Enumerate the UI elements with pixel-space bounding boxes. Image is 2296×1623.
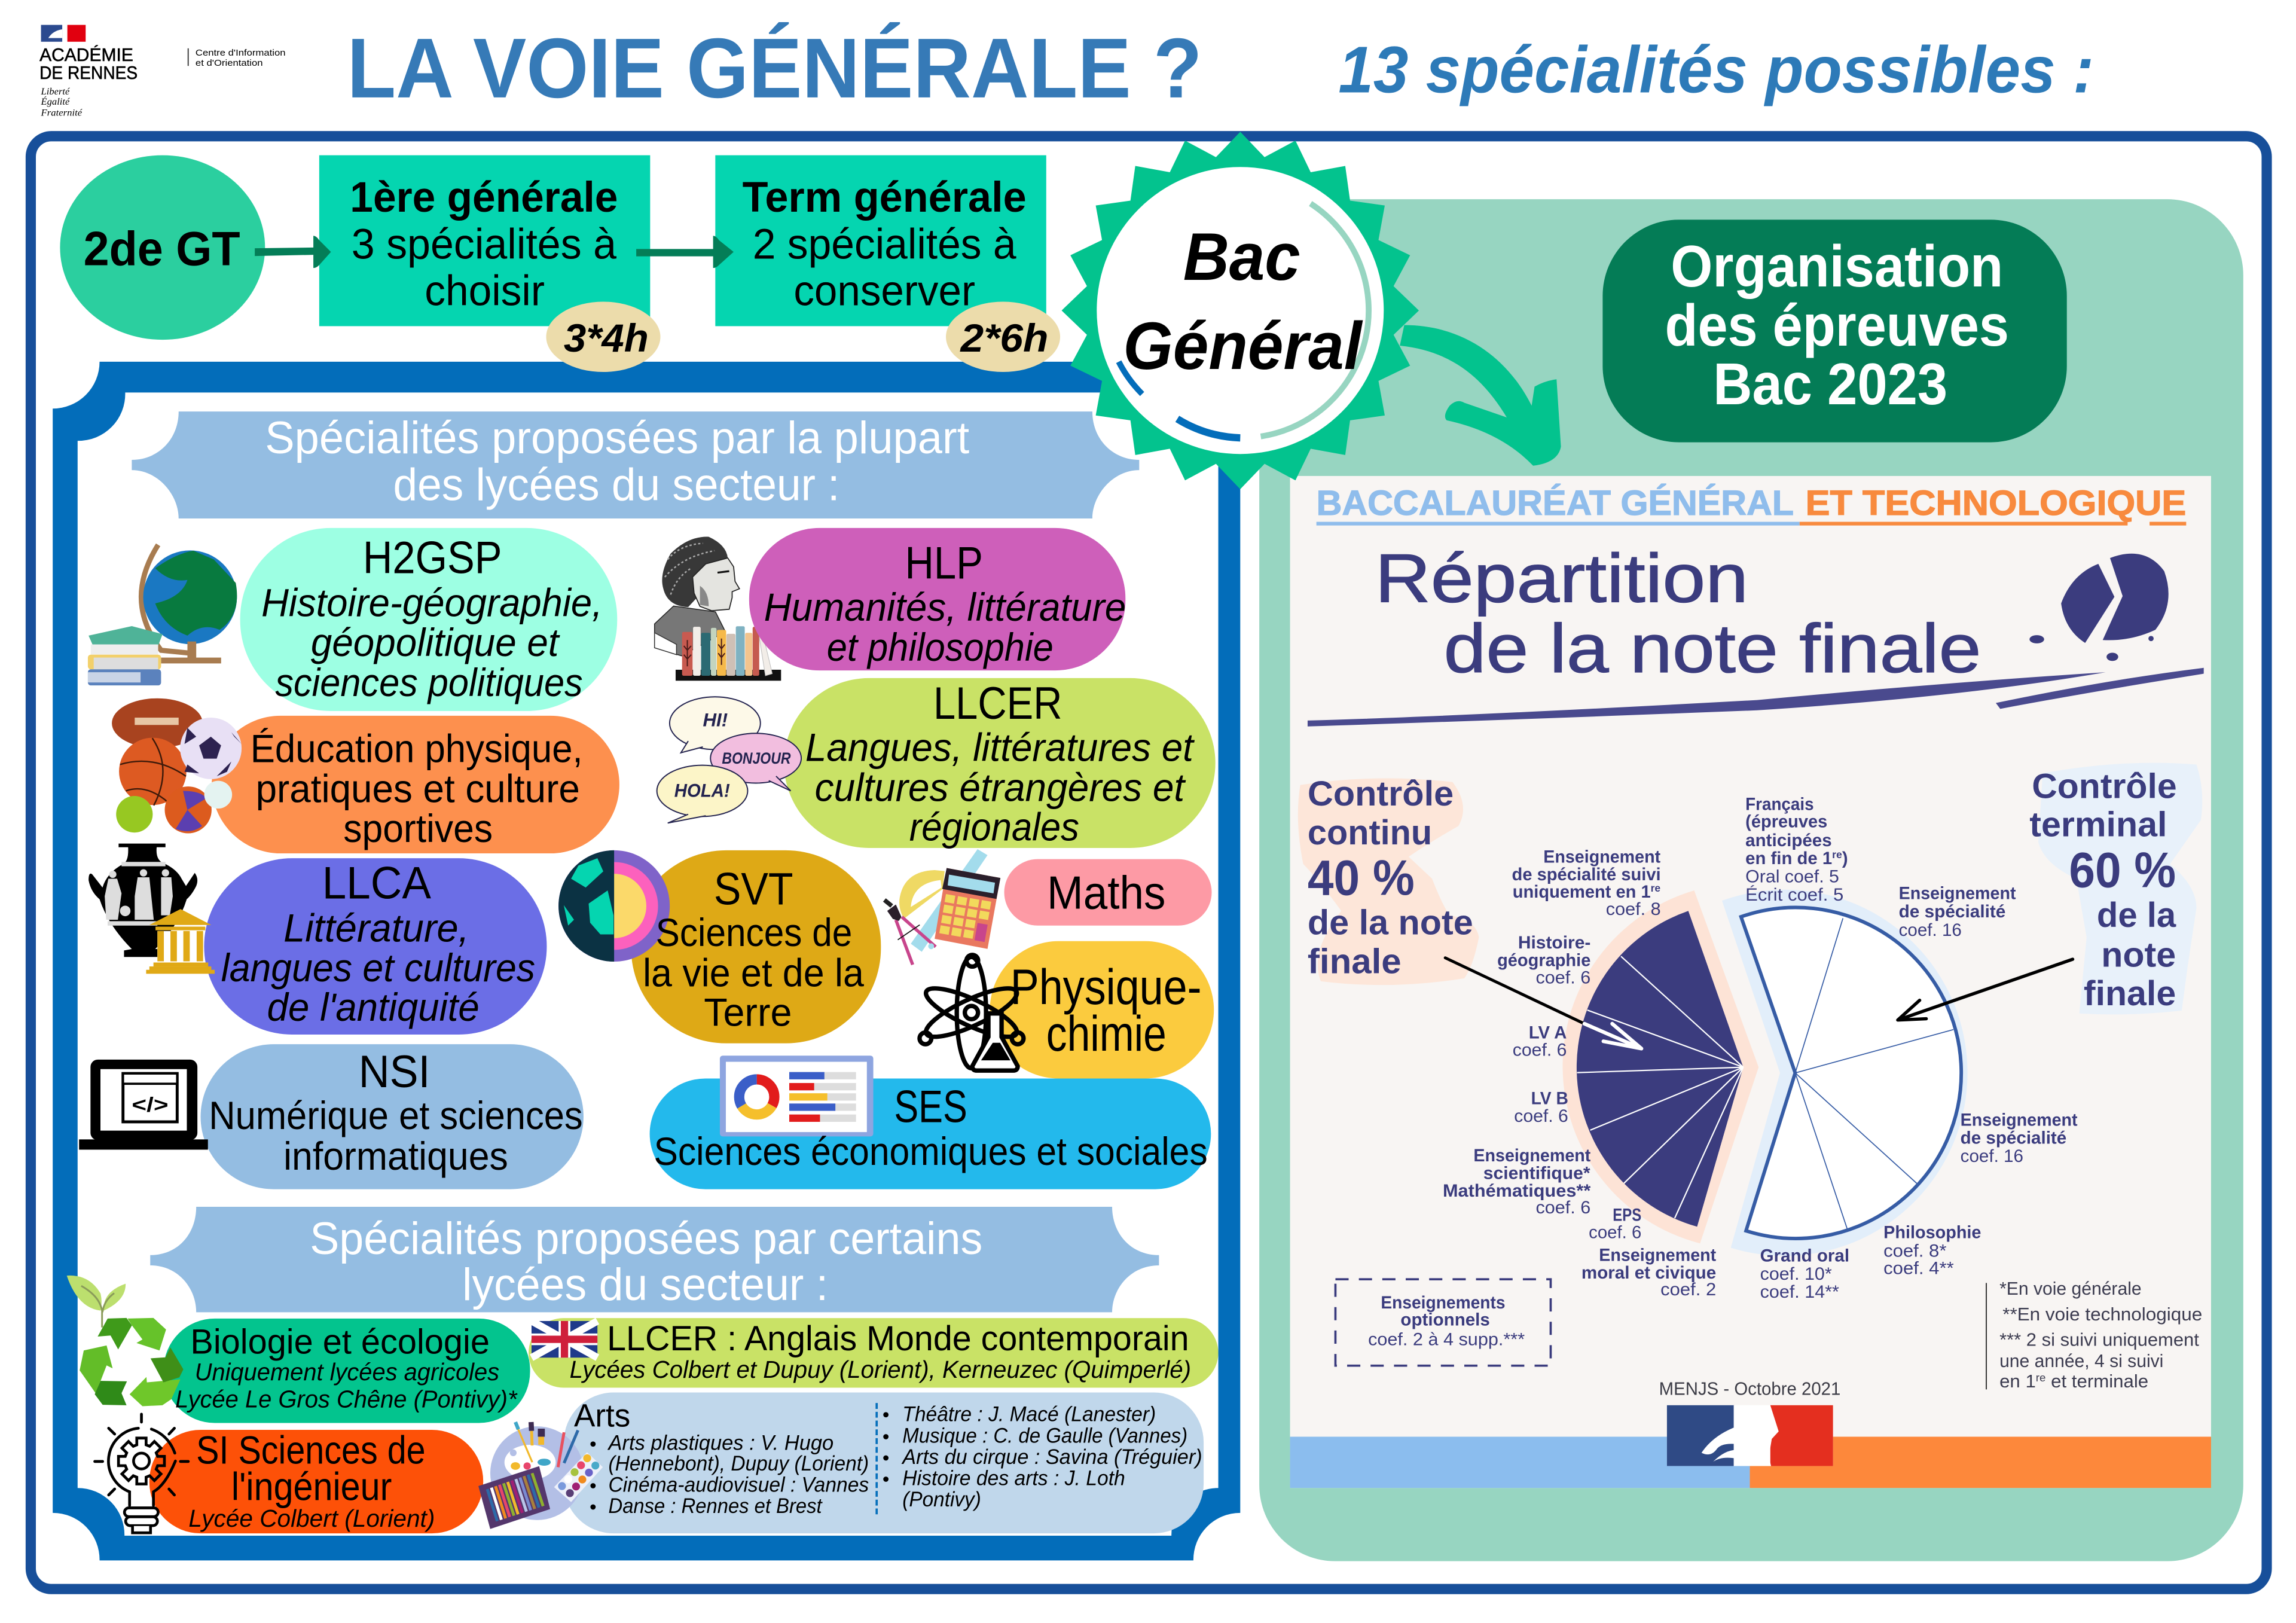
badge: 3*4h: 3*4h xyxy=(564,316,649,361)
icon: charts on screen xyxy=(720,1055,874,1136)
heading banner: la plupart des lycées xyxy=(132,411,1139,518)
heading banner: la plupart des lycées: des lycées du secteur : xyxy=(393,459,839,510)
labels: spécialité suivie en première: Enseignement xyxy=(1543,847,1660,867)
list: arts left column: Cinéma-audiovisuel : Vannes xyxy=(609,1473,869,1497)
button: Organisation des épreuves Bac 2023 xyxy=(1602,219,2067,443)
labels: enseignement de spécialité bas: Enseignement xyxy=(1961,1110,2078,1130)
arrow: contrôle continu xyxy=(1445,958,1641,1048)
node: Term générale: conserver xyxy=(793,268,975,315)
specialty: LLCER: Langues, littératures et xyxy=(805,726,1195,770)
specialty: HLP xyxy=(655,528,1126,681)
specialty: SVT xyxy=(558,850,881,1044)
specialty: SI xyxy=(94,1414,483,1533)
top path: classes xyxy=(60,155,1060,372)
labels: LV A: LV A xyxy=(1529,1023,1567,1042)
specialty: Maths: Maths xyxy=(1047,867,1165,919)
specialty: SES: Sciences économiques et sociales xyxy=(654,1130,1208,1174)
text: contrôle terminal 60 %: Contrôle xyxy=(2032,767,2177,806)
poster title xyxy=(1375,541,1981,687)
notes xyxy=(1986,1279,2202,1392)
labels: enseignement de spécialité haut: coef. 16 xyxy=(1899,920,1962,940)
labels: enseignement scientifique: scientifique* xyxy=(1483,1163,1590,1183)
labels: enseignement moral et civique xyxy=(1581,1246,1716,1299)
labels: enseignement de spécialité bas: de spécialité xyxy=(1961,1128,2066,1148)
logo: République française xyxy=(1667,1405,1833,1466)
specialty: Physique-chimie: Physique- xyxy=(1010,959,1202,1015)
text: contrôle terminal 60 %: terminal xyxy=(2029,805,2167,844)
notes: une année, 4 si suivi xyxy=(1999,1351,2163,1371)
node: 2de GT: 2de GT xyxy=(84,222,240,276)
button: Organisation des épreuves Bac 2023: des épreuves xyxy=(1665,292,2009,358)
badge: 2*6h xyxy=(946,301,1060,372)
labels: spécialité suivie en première: uniquement en 1re xyxy=(1513,882,1660,902)
list: arts right column: Histoire des arts : J. Loth xyxy=(902,1466,1125,1490)
icon: palette and pencils xyxy=(478,1422,603,1529)
box: enseignements optionnels: coef. 2 à 4 supp.*** xyxy=(1368,1329,1525,1349)
logo: Académie de Rennes: Égalité xyxy=(41,96,70,107)
specialty: Maths xyxy=(884,849,1212,965)
list: arts right column: Musique : C. de Gaulle (Vannes) xyxy=(902,1423,1187,1447)
title: LA VOIE GÉNÉRALE ? xyxy=(347,21,1202,116)
labels: Philosophie xyxy=(1883,1222,1981,1279)
specialty: H2GSP: sciences politiques xyxy=(275,661,583,705)
icon: atom and flask xyxy=(920,955,1024,1070)
labels: Histoire-géographie: Histoire- xyxy=(1518,933,1590,953)
labels: enseignement scientifique xyxy=(1443,1146,1591,1218)
labels: Grand oral xyxy=(1760,1246,1849,1302)
list: arts left column: (Hennebont), Dupuy (Lorient) xyxy=(609,1451,869,1475)
notes: *En voie générale xyxy=(1999,1279,2142,1299)
text: contrôle continu 40 %: finale xyxy=(1308,942,1402,981)
specialty: H2GSP: Histoire-géographie, xyxy=(261,581,603,626)
badge: Bac Général xyxy=(1062,132,1419,489)
labels: Philosophie: coef. 4** xyxy=(1883,1259,1954,1279)
specialty: Physique-chimie: chimie xyxy=(1046,1006,1167,1061)
labels: enseignement de spécialité haut: Enseignement xyxy=(1899,884,2016,904)
icon: speech bubbles: HOLA! xyxy=(674,779,730,801)
specialty: SI: l'ingénieur xyxy=(231,1465,392,1509)
labels: EPS: coef. 6 xyxy=(1589,1222,1641,1242)
specialty: LLCER: LLCER xyxy=(933,678,1062,729)
arrow: Bac to organisation xyxy=(1400,325,1561,466)
box: enseignements optionnels: optionnels xyxy=(1400,1310,1490,1329)
heading banner: la plupart des lycées: Spécialités proposées par la plupart xyxy=(265,413,969,463)
labels: Français xyxy=(1745,794,1848,905)
chart: contrôle continu sector xyxy=(1562,890,1758,1243)
labels: LV B: coef. 6 xyxy=(1514,1106,1568,1126)
panel: spécialités (blue frame) xyxy=(53,362,1240,1560)
labels: LV A: coef. 6 xyxy=(1513,1041,1567,1060)
panel: Répartition de la note finale poster xyxy=(1290,476,2211,1488)
labels: spécialité suivie en première: coef. 8 xyxy=(1606,899,1661,919)
logo: Académie de Rennes xyxy=(39,25,286,118)
specialty: SVT: Sciences de xyxy=(656,911,852,955)
text: contrôle continu 40 %: Contrôle xyxy=(1308,774,1454,813)
arrow: 2de to 1ère xyxy=(255,236,331,268)
heading banner: certains lycées: Spécialités proposées par certains xyxy=(310,1213,982,1264)
logo: Académie de Rennes: Fraternité xyxy=(41,108,83,118)
labels: spécialité suivie en première: de spécialité suivi xyxy=(1512,865,1661,884)
heading banner: certains lycées xyxy=(150,1207,1159,1312)
icon: Greek vase and temple xyxy=(88,844,215,974)
labels: LV B xyxy=(1514,1089,1568,1126)
specialty: LLCER xyxy=(657,678,1216,850)
specialty: SVT: SVT xyxy=(714,864,793,915)
node: 1ère générale xyxy=(319,155,650,326)
icon: calculator and geometry tools xyxy=(884,849,1000,965)
specialty: Biologie et écologie: Lycée Le Gros Chêne (Pontivy)* xyxy=(175,1386,518,1413)
specialty: H2GSP: géopolitique et xyxy=(311,621,560,665)
specialty: LLCA: Littérature, xyxy=(283,907,469,951)
labels: Français: Français xyxy=(1745,794,1814,814)
halo: contrôle terminal xyxy=(2038,763,2202,1014)
specialty: Biologie et écologie: Biologie et écologie xyxy=(190,1323,490,1362)
specialty: SI: SI Sciences de xyxy=(196,1428,426,1472)
button: Organisation des épreuves Bac 2023: Bac 2023 xyxy=(1713,351,1947,417)
node: 1ère générale: choisir xyxy=(425,268,545,315)
labels: EPS xyxy=(1589,1205,1641,1242)
labels: Grand oral: Grand oral xyxy=(1760,1246,1849,1265)
specialty: HLP: HLP xyxy=(905,538,983,588)
badge: 3*4h xyxy=(546,301,660,372)
labels: Philosophie: coef. 8* xyxy=(1883,1241,1946,1261)
labels: LV B: LV B xyxy=(1531,1089,1568,1109)
subtitle: 13 spécialités possibles: 13 spécialités possibles : xyxy=(1338,33,2094,106)
specialty: HLP: Humanités, littérature xyxy=(764,585,1126,630)
labels: EPS: EPS xyxy=(1613,1205,1641,1225)
poster header xyxy=(1317,483,2186,526)
logo: Académie de Rennes: et d'Orientation xyxy=(196,59,263,68)
labels: Histoire-géographie: coef. 6 xyxy=(1535,968,1590,987)
labels: enseignement scientifique: Mathématiques** xyxy=(1443,1181,1591,1201)
node: Term générale xyxy=(715,155,1046,326)
labels: LV A xyxy=(1513,1023,1567,1060)
poster header: BACCALAURÉAT GÉNÉRAL xyxy=(1317,483,1794,523)
text: contrôle terminal 60 %: de la xyxy=(2097,896,2176,935)
specialty: Éducation physique: Éducation physique, xyxy=(251,727,583,771)
specialty: SI: Lycée Colbert (Lorient) xyxy=(188,1505,435,1532)
text: contrôle terminal 60 % xyxy=(2029,767,2177,1013)
poster title: Répartition xyxy=(1375,541,1748,617)
labels: Grand oral: coef. 14** xyxy=(1760,1282,1839,1302)
notes: en 1re et terminale xyxy=(1999,1371,2148,1392)
icon: small pie xyxy=(2029,554,2169,661)
specialty: Éducation physique xyxy=(112,698,619,853)
icon: computer: </> xyxy=(132,1094,169,1116)
specialty: SVT: Terre xyxy=(704,991,792,1035)
labels: enseignement de spécialité haut: de spécialité xyxy=(1899,902,2005,922)
specialty: NSI: NSI xyxy=(359,1047,430,1097)
panel: organisation des épreuves (mint background) xyxy=(1259,199,2243,1561)
labels: Français: (épreuves xyxy=(1745,812,1827,832)
node: Term générale: 2 spécialités à xyxy=(753,221,1016,268)
box: enseignements optionnels: Enseignements xyxy=(1381,1293,1506,1313)
source: MENJS - Octobre 2021 xyxy=(1659,1378,1840,1399)
labels: enseignement scientifique: coef. 6 xyxy=(1535,1198,1590,1218)
specialty: Biologie et écologie: Uniquement lycées agricoles xyxy=(195,1358,499,1386)
labels: Histoire-géographie xyxy=(1497,933,1590,987)
icon: philosopher bust and books xyxy=(655,537,781,681)
labels: Français: Écrit coef. 5 xyxy=(1745,885,1843,905)
specialty: Physique-chimie xyxy=(920,941,1214,1078)
arrow: 1ère to Term xyxy=(636,236,734,268)
text: contrôle terminal 60 %: 60 % xyxy=(2069,842,2176,898)
logo: Académie de Rennes: Liberté xyxy=(41,87,70,97)
specialty: SES: SES xyxy=(894,1082,967,1133)
list: arts left column: Arts plastiques : V. Hugo xyxy=(607,1431,833,1455)
labels: Français: Oral coef. 5 xyxy=(1745,867,1839,886)
specialty: LLCA xyxy=(88,844,546,1035)
specialty: LLCA: de l'antiquité xyxy=(267,986,480,1030)
badge: 2*6h: 2*6h xyxy=(959,316,1048,361)
list: arts right column: Arts du cirque : Savina (Tréguier) xyxy=(901,1445,1202,1469)
list: arts left column xyxy=(590,1431,869,1518)
logo: Académie de Rennes: Centre d'Information xyxy=(196,48,286,58)
labels: Philosophie: Philosophie xyxy=(1883,1222,1981,1242)
labels: enseignement de spécialité bas xyxy=(1961,1110,2078,1166)
logo: Académie de Rennes: ACADÉMIE xyxy=(39,44,133,65)
notes: *** 2 si suivi uniquement xyxy=(1999,1330,2199,1350)
specialty: Arts xyxy=(478,1393,1204,1533)
labels: enseignement de spécialité bas: coef. 16 xyxy=(1961,1146,2023,1166)
arrow: contrôle terminal xyxy=(1898,959,2073,1020)
specialty: Biologie et écologie xyxy=(67,1276,530,1423)
icon: computer xyxy=(79,1060,208,1149)
labels: Grand oral: coef. 10* xyxy=(1760,1264,1832,1284)
specialty: LLCA: langues et cultures xyxy=(221,946,535,990)
icon: gear in light bulb xyxy=(94,1414,188,1533)
node: 1ère générale: 3 spécialités à xyxy=(352,221,617,268)
specialty: SVT: la vie et de la xyxy=(643,951,864,996)
text: contrôle continu 40 %: de la note xyxy=(1308,903,1473,942)
icon: globe and books xyxy=(88,545,237,685)
icon: recycling and plant xyxy=(67,1276,184,1407)
icon: speech bubbles: HI! xyxy=(703,709,728,731)
poster header: ET TECHNOLOGIQUE xyxy=(1806,484,2186,523)
halo: contrôle continu xyxy=(1298,778,1479,985)
node: Term générale: Term générale xyxy=(743,174,1027,221)
list: arts right column: Théâtre : J. Macé (Lanester) xyxy=(902,1402,1156,1426)
badge: Bac Général: Bac xyxy=(1183,219,1300,294)
labels: Français: anticipées xyxy=(1745,831,1832,850)
labels: Histoire-géographie: géographie xyxy=(1497,950,1590,970)
specialty: LLCA: LLCA xyxy=(322,858,431,908)
specialty: Arts: Arts xyxy=(574,1398,630,1433)
labels: spécialité suivie en première xyxy=(1512,847,1661,919)
labels: enseignement moral et civique: moral et civique xyxy=(1581,1263,1716,1283)
specialty: H2GSP: H2GSP xyxy=(363,532,502,583)
brush stroke xyxy=(1308,668,2204,727)
list: arts right column: (Pontivy) xyxy=(902,1487,981,1511)
icon: UK flag xyxy=(532,1321,597,1357)
specialty: LLCER Anglais xyxy=(529,1318,1219,1387)
specialty: Éducation physique: pratiques et culture xyxy=(256,767,580,812)
text: contrôle continu 40 %: continu xyxy=(1308,813,1432,852)
text: contrôle terminal 60 %: note xyxy=(2101,935,2176,974)
specialty: HLP: et philosophie xyxy=(827,626,1054,670)
specialty: NSI: informatiques xyxy=(283,1134,508,1179)
node: 2de GT xyxy=(60,155,265,340)
heading banner: certains lycées: lycées du secteur : xyxy=(462,1259,828,1310)
poster title: de la note finale xyxy=(1444,611,1981,687)
labels: enseignement moral et civique: Enseignement xyxy=(1599,1246,1716,1265)
specialty: NSI: Numérique et sciences xyxy=(209,1094,583,1138)
icon: speech bubbles xyxy=(657,697,801,823)
specialty: NSI xyxy=(79,1044,584,1189)
icon: sports balls xyxy=(112,698,242,833)
specialty: SES xyxy=(650,1055,1211,1189)
icon: Earth cross-section xyxy=(558,850,670,962)
labels: enseignement de spécialité haut xyxy=(1899,884,2016,940)
text: contrôle terminal 60 %: finale xyxy=(2084,974,2176,1013)
specialty: LLCER: cultures étrangères et xyxy=(815,766,1186,810)
labels: enseignement scientifique: Enseignement xyxy=(1473,1146,1591,1166)
specialty: LLCER Anglais: Lycées Colbert et Dupuy (Lorient), Kerneuzec (Quimperlé) xyxy=(570,1356,1191,1383)
notes: **En voie technologique xyxy=(2002,1304,2202,1325)
labels: enseignement moral et civique: coef. 2 xyxy=(1660,1280,1716,1299)
specialty: LLCER: régionales xyxy=(909,806,1079,850)
icon: speech bubbles: BONJOUR xyxy=(722,749,791,767)
list: arts right column xyxy=(883,1402,1202,1511)
badge: Bac Général: Général xyxy=(1123,308,1363,383)
button: Organisation des épreuves Bac 2023: Organisation xyxy=(1671,233,2003,299)
specialty: Éducation physique: sportives xyxy=(343,807,493,851)
specialty: LLCER Anglais: LLCER : Anglais Monde contemporain xyxy=(607,1319,1189,1358)
chart: contrôle terminal sector xyxy=(1722,890,1968,1256)
text: contrôle continu 40 % xyxy=(1308,774,1473,981)
list: arts left column: Danse : Rennes et Brest xyxy=(609,1494,823,1518)
specialty: H2GSP xyxy=(88,528,617,711)
labels: Français: en fin de 1re) xyxy=(1745,849,1848,868)
node: 1ère générale: 1ère générale xyxy=(350,174,618,221)
logo: Académie de Rennes: DE RENNES xyxy=(39,63,138,83)
box: enseignements optionnels xyxy=(1335,1279,1550,1366)
text: contrôle continu 40 %: 40 % xyxy=(1308,850,1415,905)
